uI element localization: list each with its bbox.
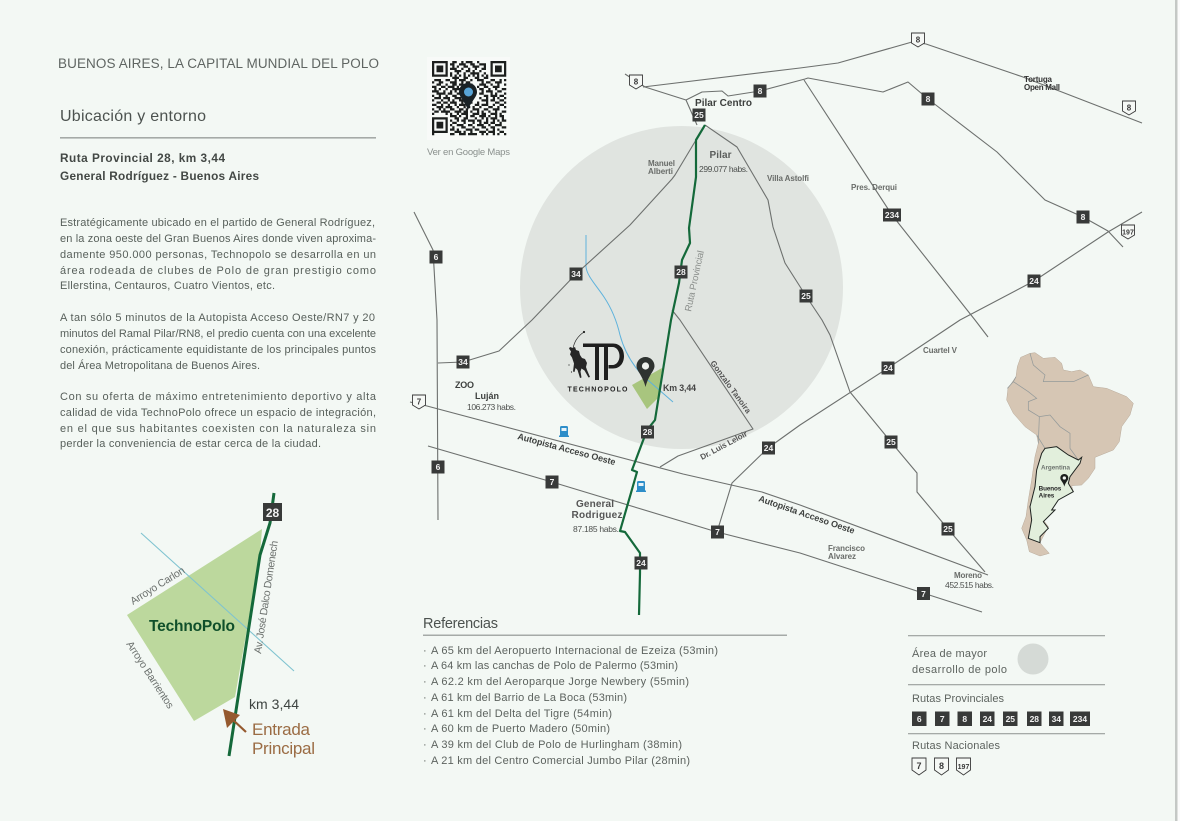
legend: provincial routes: 6: [917, 714, 922, 724]
text block: description: Ellerstina, Centauros, Cuatro Vientos, etc.: [60, 280, 275, 292]
place labels: Villa Astolfi: [767, 174, 809, 183]
list of distances: A 64 km las canchas de Polo de Palermo (53min): [431, 660, 678, 672]
provincial route badges: 24: [764, 443, 773, 453]
place labels: Km 3,44: [663, 383, 696, 393]
legend: national routes: 7: [916, 761, 922, 771]
legend: provincial routes: 7: [940, 714, 945, 724]
place labels: Open Mall: [1024, 83, 1060, 92]
place labels: ZOO: [455, 380, 474, 390]
label Buenos Aires: Aires: [1039, 493, 1055, 500]
legend: polo development area: Área de mayor: [912, 647, 987, 660]
place labels: Dr. Luis Leloir: [699, 429, 749, 462]
place labels: 452.515 habs.: [945, 580, 994, 590]
provincial route badges: 25: [694, 110, 704, 120]
place labels: Autopista Acceso Oeste: [757, 493, 856, 536]
provincial route badges: 34: [571, 269, 581, 279]
heading: Referencias: Referencias: [423, 616, 498, 632]
legend: provincial routes: Rutas Provinciales: [912, 693, 1004, 705]
panel: references: [423, 616, 787, 767]
list of distances: ·: [423, 755, 427, 767]
place labels: [455, 75, 1060, 590]
provincial route badges: 7: [921, 589, 926, 599]
legend: polo development area: desarrollo de polo: [912, 664, 1007, 676]
national route shields: 8: [1127, 104, 1132, 112]
QR code: [427, 57, 510, 140]
stream: [141, 533, 294, 671]
list of distances: [423, 645, 718, 767]
legend: provincial routes: 24: [983, 714, 992, 724]
place labels: Alvarez: [828, 552, 856, 561]
legend: national routes: [912, 740, 1000, 775]
place labels: Alberti: [648, 167, 673, 176]
provincial route badges: 8: [758, 86, 763, 96]
place labels: Autopista Acceso Oeste: [516, 431, 617, 467]
label Argentina: Argentina: [1041, 465, 1070, 472]
text block: description: [60, 217, 377, 450]
place labels: Cuartel V: [923, 346, 958, 355]
text block: description: del Área Metropolitana de Buenos Aires.: [60, 359, 260, 372]
provincial route badges: 8: [1081, 212, 1086, 222]
panel: South America locator map: [1007, 353, 1133, 556]
river: [586, 235, 673, 402]
list of distances: A 62.2 km del Aeroparque Jorge Newbery (55min): [431, 676, 689, 688]
legend: national routes: Rutas Nacionales: [912, 740, 1000, 752]
road network: [410, 42, 1142, 612]
provincial route badges: 25: [886, 437, 896, 447]
legend: national routes: 8: [939, 761, 944, 771]
country borders: [1007, 353, 1088, 460]
logo: TechnoPolo: TECHNOPOLO: [568, 386, 628, 394]
legend: national routes: 197: [958, 764, 969, 771]
site polygon: [632, 368, 662, 409]
place labels: General: [576, 499, 614, 510]
provincial route badges: 24: [883, 363, 893, 373]
list of distances: A 39 km del Club de Polo de Hurlingham (38min): [431, 739, 682, 751]
text block: description: A tan sólo 5 minutos de la Autopista Acceso Oeste/RN7 y 20: [60, 312, 375, 324]
badge 28: 28: [266, 506, 279, 520]
provincial route badges: 7: [715, 527, 720, 537]
label avenue: Av. José Dalco Domenech: [252, 540, 281, 654]
place labels: Rodriguez: [572, 510, 622, 521]
provincial route badges: 6: [436, 462, 441, 472]
logo: TechnoPolo: [568, 331, 628, 394]
place labels: Ruta Provincial: [683, 250, 707, 313]
text block: description: minutos del Ramal Pilar/RN8, el predio cuenta con una excelente: [60, 328, 376, 340]
list of distances: ·: [423, 660, 427, 672]
pin: [1060, 474, 1068, 487]
legend: provincial routes: 25: [1006, 714, 1015, 724]
place labels: 87.185 habs.: [573, 524, 619, 534]
place labels: Pres. Derqui: [851, 183, 897, 192]
text block: description: conexión, prácticamente equidistante de los principales puntos: [60, 344, 376, 356]
list of distances: ·: [423, 708, 427, 720]
list of distances: ·: [423, 739, 427, 751]
provincial route badges: 7: [550, 477, 555, 487]
provincial route badges: 234: [885, 210, 899, 220]
text block: description: en la zona oeste del Gran Buenos Aires donde viven aproxima-: [60, 233, 376, 245]
national route shields: 8: [634, 78, 639, 86]
provincial route badges: 25: [801, 291, 811, 301]
legend: provincial routes: 34: [1052, 714, 1061, 724]
panel: site detail map: [123, 493, 315, 758]
icon: location pin: [636, 357, 654, 387]
legend: polo development area: [912, 644, 1048, 676]
icon: QR map pin: [459, 83, 477, 110]
text block: description: perder la conveniencia de estar cerca de la ciudad.: [60, 438, 321, 450]
legend: provincial routes: 8: [962, 714, 967, 724]
site polygon: [127, 529, 262, 721]
text block: description: en el que sus habitantes coexisten con la naturaleza sin: [60, 423, 376, 435]
list of distances: ·: [423, 645, 427, 657]
address: General Rodríguez - Buenos Aires: [60, 169, 259, 183]
national route shields: [412, 33, 1136, 409]
QR caption: Ver en Google Maps: [427, 147, 510, 158]
provincial route badges: [430, 84, 1090, 600]
list of distances: ·: [423, 723, 427, 735]
address: [60, 151, 259, 183]
label km: km 3,44: [249, 696, 299, 712]
place labels: Luján: [475, 391, 499, 401]
route 28: [620, 125, 705, 615]
list of distances: ·: [423, 692, 427, 704]
text block: description: Estratégicamente ubicado en el partido de General Rodríguez,: [60, 217, 375, 229]
label Buenos Aires: Buenos: [1039, 486, 1062, 493]
text block: description: damente 950.000 personas, Technopolo se desarrolla en un: [60, 249, 376, 261]
place labels: 106.273 habs.: [467, 402, 516, 412]
label main entrance: Principal: [252, 739, 315, 758]
provincial route badges: 24: [1029, 276, 1039, 286]
provincial route badges: 6: [434, 252, 439, 262]
address: Ruta Provincial 28, km 3,44: [60, 151, 225, 165]
heading: Ubicación y entorno: Ubicación y entorno: [60, 108, 206, 125]
legend: provincial routes: 28: [1030, 714, 1039, 724]
place labels: Moreno: [954, 571, 982, 580]
provincial route badges: 34: [458, 357, 468, 367]
Argentina: [1028, 447, 1082, 543]
icon: fuel station 2: [636, 481, 646, 492]
text block: description: Con su oferta de máximo entretenimiento deportivo y alta: [60, 391, 377, 403]
panel: legend: [908, 635, 1105, 775]
provincial route badges: 25: [943, 524, 953, 534]
place labels: Francisco: [828, 544, 865, 553]
list of distances: A 61 km del Barrio de La Boca (53min): [431, 692, 627, 704]
national route shields: 197: [1122, 230, 1134, 236]
road 28: [229, 493, 274, 756]
label Arroyo Barrientos: Arroyo Barrientos: [123, 639, 176, 711]
place labels: Pilar Centro: [695, 98, 752, 109]
list of distances: A 21 km del Centro Comercial Jumbo Pilar (28min): [431, 755, 690, 767]
label main entrance: [252, 720, 315, 758]
provincial route badges: 8: [926, 94, 931, 104]
label main entrance: Entrada: [252, 720, 311, 739]
label Buenos Aires: [1039, 486, 1062, 500]
provincial route badges: 28: [643, 427, 652, 437]
title: BUENOS AIRES, LA CAPITAL MUNDIAL DEL POLO: [58, 56, 379, 71]
icon: fuel station 1: [559, 426, 569, 437]
area of highest polo development: [520, 126, 843, 449]
place labels: Pilar: [710, 150, 732, 161]
place labels: Manuel: [648, 159, 675, 168]
label Arroyo Carlon: Arroyo Carlon: [128, 564, 187, 608]
list of distances: A 65 km del Aeropuerto Internacional de Ezeiza (53min): [431, 645, 718, 657]
list of distances: A 60 km de Puerto Madero (50min): [431, 723, 610, 735]
arrow: main entrance: [223, 709, 246, 732]
label TechnoPolo: TechnoPolo: [149, 618, 235, 635]
place labels: Gonzalo Tanoira: [708, 359, 753, 416]
list of distances: A 61 km del Delta del Tigre (54min): [431, 708, 612, 720]
national route shields: 8: [916, 36, 921, 44]
place labels: Tortuga: [1024, 75, 1053, 84]
text block: description: calidad de vida TechnoPolo ofrece un espacio de integración,: [60, 407, 376, 419]
provincial route badges: 28: [676, 267, 686, 277]
legend: provincial routes: [912, 693, 1090, 726]
provincial route badges: 24: [636, 558, 646, 568]
panel: main map: [410, 33, 1142, 615]
continent: [1007, 353, 1133, 556]
national route shields: 7: [417, 398, 422, 406]
badge 28: [263, 503, 282, 521]
place labels: 299.077 habs.: [699, 164, 748, 174]
text block: description: área rodeada de clubes de Polo de gran prestigio como: [60, 265, 376, 277]
list of distances: ·: [423, 676, 427, 688]
legend: provincial routes: 234: [1073, 714, 1087, 724]
